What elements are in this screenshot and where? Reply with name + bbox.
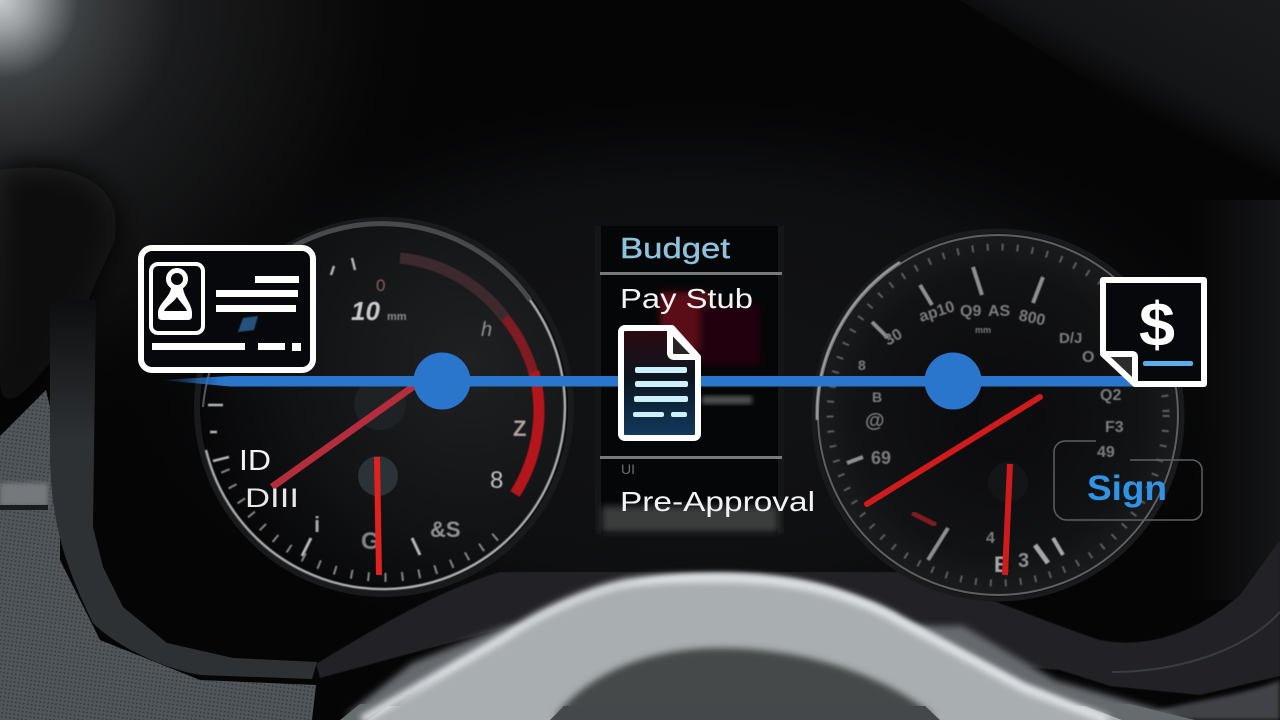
right gauge digits: AS [988,303,1011,320]
wheel shoulder base [340,704,1195,720]
lower left shadow [0,168,116,420]
timeline node: right [924,352,982,410]
label: Pre-Approval: Pre-Approval [620,486,815,517]
icon: pay stub document [621,328,698,438]
wheel hub [555,648,935,716]
right gauge digits: ap10 [917,298,957,326]
right gauge digits: B [872,389,882,405]
ID card text lines [152,276,301,351]
document lines [633,367,688,417]
wheel face [381,573,1100,716]
dollar sign: $ [1139,291,1175,360]
button: Sign: Sign [1087,469,1167,508]
left bezel [50,300,317,679]
ID card reflections [238,316,258,332]
timeline node: left [414,352,470,410]
panel glow: lower reflection [602,506,778,532]
lit shroud top left [0,0,450,440]
left gauge rim [270,224,530,300]
left gauge digits [314,276,526,555]
divider: bottom [600,456,782,459]
vent trim [0,483,48,506]
icon: ID card [141,248,313,370]
right gauge red mark [912,513,936,525]
right gauge digits: 69 [871,448,891,468]
wheel bright rim [362,578,1108,720]
wheel shoulders [345,626,1180,716]
left gauge digits: mm [387,311,407,323]
cluster cavity [130,90,1250,670]
left gauge digits: 8 [490,467,503,494]
right gauge digits: Q2 [1100,387,1121,404]
left gauge digits: G [361,528,380,555]
ID card photo [151,264,203,333]
left gauge hubs [354,378,406,430]
right gauge digits: mm [975,325,991,335]
right gauge rim highlight [817,262,900,420]
left gauge digits: &S [430,517,461,542]
right gauge digits: 49 [1097,444,1115,461]
steering wheel [340,573,1195,720]
right gauge tick marks [830,247,1166,583]
left gauge digits: h [481,319,492,341]
left gauge digits: 10 [351,296,380,326]
label: ID: ID [239,445,271,477]
right gauge digits: 4 [986,530,995,547]
right gauge digits: E [994,552,1009,577]
icon: dollar note [1103,280,1204,384]
note fold [1103,354,1135,384]
right gauge needles [867,397,1040,504]
center panel: document list [598,226,815,534]
right gauge [814,231,1182,599]
timeline [160,352,1140,410]
right gauge digits: 800 [1017,307,1047,329]
fabric panel [0,390,316,720]
right side panel [1190,200,1280,600]
right gauge digits: Q9 [960,303,981,320]
left gauge red zone [400,258,539,494]
right gauge long ticks [847,267,1063,563]
left gauge digits: Z [513,416,526,441]
lower dash band [316,540,1280,695]
left gauge digits: 0 [376,276,385,295]
button: Sign [1054,441,1202,520]
dash band trim [1112,612,1280,672]
right gauge digits: 3 [1018,550,1029,572]
right gauge digits: D/J [1059,330,1082,347]
document fold [670,329,697,357]
label: DIII: DIII [245,483,299,513]
shroud top right [960,0,1280,200]
left gauge long ticks [208,258,420,556]
right gauge digits: 8 [858,357,866,373]
right gauge digits [858,298,1124,577]
wheel hub base [550,706,940,720]
left gauge [197,220,571,594]
panel ghost digits: UI [621,461,635,477]
right gauge digits: @ [865,410,885,432]
label: Pay Stub: Pay Stub [620,283,753,314]
left gauge needles [272,386,414,487]
left gauge bottom ticks [225,470,503,577]
left gauge digits: i [314,512,320,537]
wheel face base [368,706,1122,720]
right gauge digits: O [1082,349,1094,366]
panel ghost text [702,396,752,404]
panel glow: red reflection [660,292,710,352]
label: Budget: Budget [620,233,730,265]
right gauge hubs [977,387,1033,443]
lower right fabric [1130,680,1280,720]
timeline bar [160,376,1140,386]
right gauge digits: F3 [1105,419,1124,436]
note underline [1143,361,1193,366]
right gauge digits: 30 [882,326,906,349]
divider: top [600,272,782,275]
